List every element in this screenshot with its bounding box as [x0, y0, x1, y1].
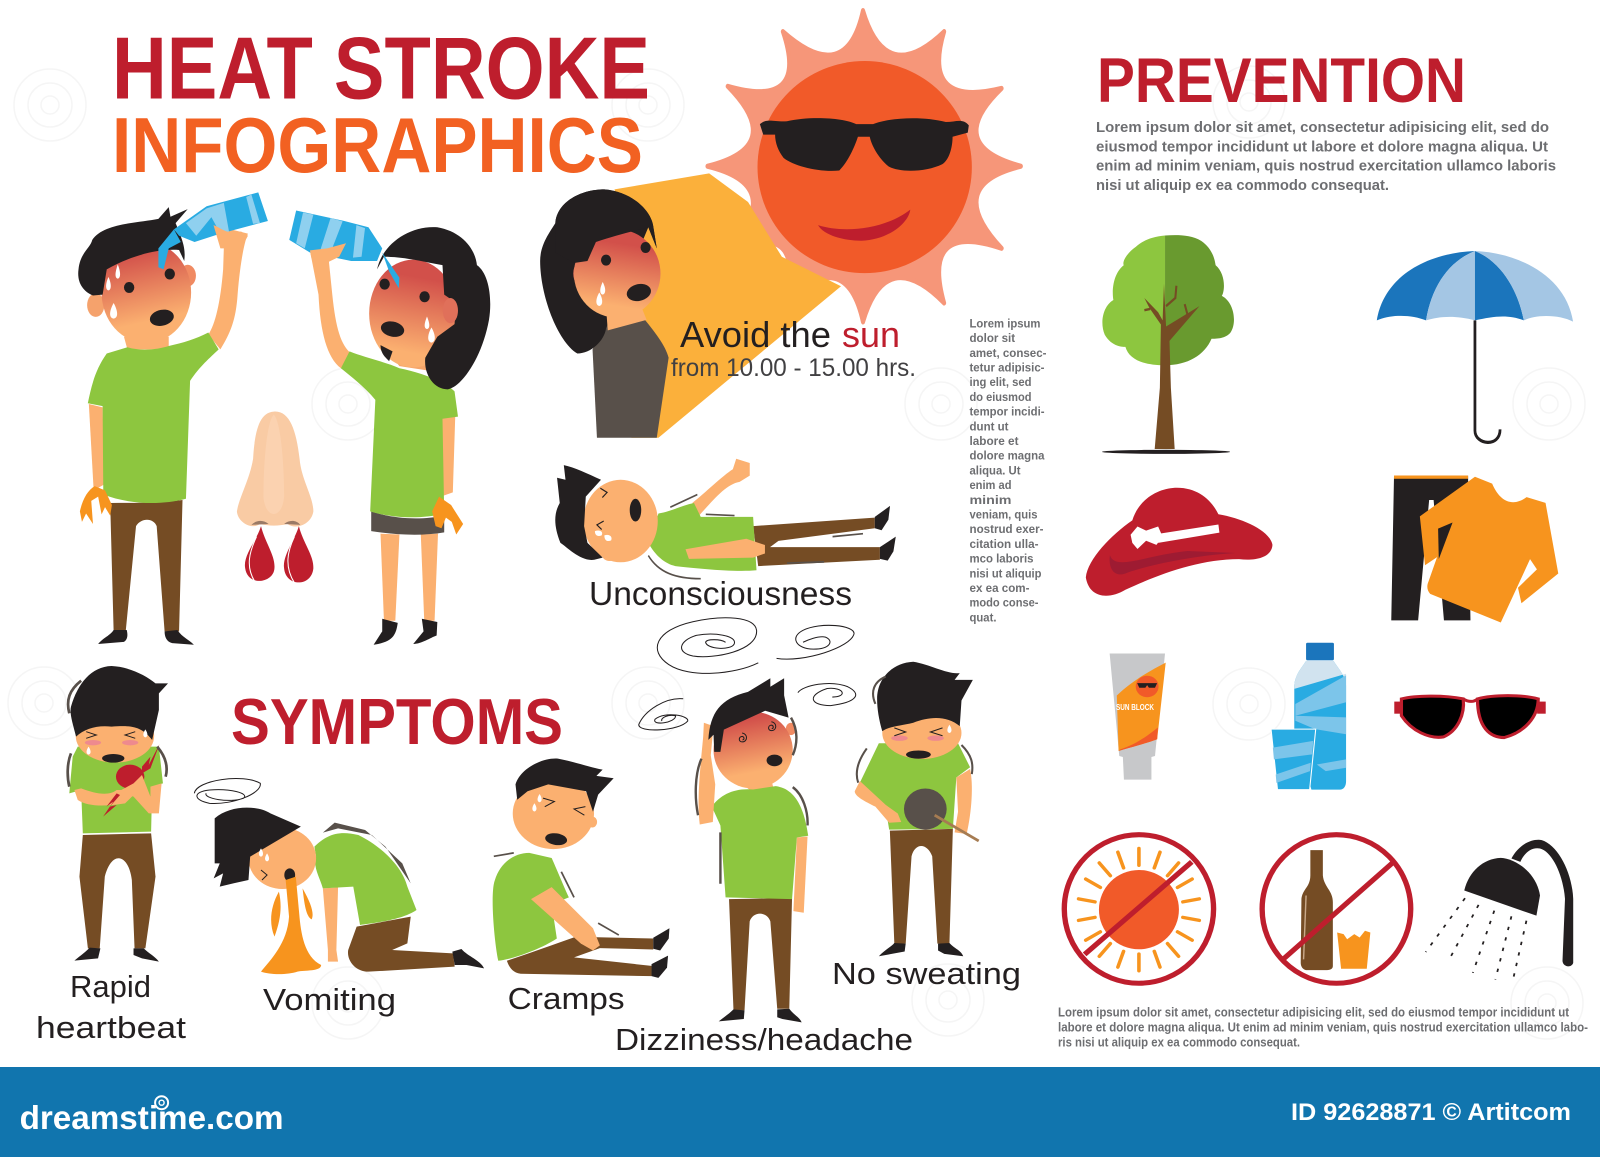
- text block: bottom lorem ipsum: Lorem ipsum dolor sit amet, consectetur adipisicing elit, sed do eiusmod tempor incididunt ut: [1058, 1006, 1570, 1020]
- text block: prevention intro: enim ad minim veniam, quis nostrud exercitation ullamco laboris: [1096, 159, 1556, 175]
- figure: cramps man: [493, 759, 669, 978]
- text block: narrow lorem ipsum column: amet, consec-: [970, 348, 1047, 360]
- footer: image id and credit: ID 92628871 © Artitcom: [1291, 1099, 1571, 1126]
- icon: water bottle and glass: [1271, 643, 1346, 790]
- label: avoid the sun: sun: [842, 314, 900, 355]
- text block: narrow lorem ipsum column: [970, 318, 1047, 624]
- figure: woman pouring water on head: [289, 210, 490, 645]
- title: heat stroke infographics: HEAT STROKE: [112, 18, 650, 118]
- symptom labels: [36, 956, 1021, 1057]
- text block: prevention intro: eiusmod tempor incididunt ut labore et dolore magna aliqua. Ut: [1096, 139, 1548, 155]
- text block: narrow lorem ipsum column: tetur adipisic-: [970, 362, 1045, 374]
- text block: narrow lorem ipsum column: veniam, quis: [970, 510, 1038, 522]
- figure: no sweating man with fan: [855, 662, 979, 956]
- text block: narrow lorem ipsum column: quat.: [970, 612, 996, 624]
- text block: narrow lorem ipsum column: nisi ut aliquip: [970, 568, 1042, 580]
- text block: prevention intro: Lorem ipsum dolor sit amet, consectetur adipisicing elit, sed do: [1096, 120, 1549, 136]
- text block: narrow lorem ipsum column: aliqua. Ut: [970, 465, 1021, 477]
- icon: umbrella: [1377, 251, 1573, 442]
- icon: sunblock tube: [1110, 654, 1166, 780]
- icon: long sleeve clothes: [1391, 476, 1558, 622]
- text block: narrow lorem ipsum column: modo conse-: [970, 598, 1039, 610]
- text block: narrow lorem ipsum column: nostrud exer-: [970, 524, 1044, 536]
- text block: bottom lorem ipsum: ris nisi ut aliquip ex ea commodo consequat.: [1058, 1035, 1300, 1049]
- text block: narrow lorem ipsum column: tempor incidi-: [970, 407, 1045, 419]
- icon: no alcohol sign: [1262, 835, 1411, 983]
- text block: narrow lorem ipsum column: ex ea com-: [970, 583, 1030, 595]
- symptom labels: Cramps: [508, 981, 625, 1016]
- text block: narrow lorem ipsum column: enim ad: [970, 480, 1012, 492]
- symptom labels: heartbeat: [36, 1010, 186, 1045]
- symptom labels: Dizziness/headache: [615, 1022, 913, 1057]
- symptom labels: No sweating: [832, 956, 1021, 991]
- icon: red hat: [1086, 488, 1272, 596]
- icon: no sun sign: [1064, 835, 1214, 983]
- label: avoid the sun: Avoid the: [680, 314, 831, 355]
- icon: dizzy spirals: [639, 618, 856, 730]
- figure: woman in the sun: [540, 189, 669, 438]
- text block: bottom lorem ipsum: [1058, 1006, 1588, 1049]
- text block: narrow lorem ipsum column: labore et: [970, 436, 1019, 448]
- text block: narrow lorem ipsum column: do eiusmod: [970, 392, 1032, 404]
- text block: narrow lorem ipsum column: dolore magna: [970, 451, 1045, 463]
- text block: narrow lorem ipsum column: dunt ut: [970, 421, 1009, 433]
- text block: narrow lorem ipsum column: Lorem ipsum: [970, 318, 1040, 330]
- heading: prevention: PREVENTION: [1097, 46, 1466, 116]
- figure: dizzy man: [696, 678, 808, 1022]
- text block: narrow lorem ipsum column: citation ulla-: [970, 539, 1039, 551]
- figure: cramps, dizziness and no sweating men: [493, 618, 979, 1022]
- text block: narrow lorem ipsum column: ing elit, sed: [970, 377, 1032, 389]
- title: heat stroke infographics: [112, 18, 650, 189]
- label: unconsciousness: Unconsciousness: [589, 575, 852, 612]
- text block: narrow lorem ipsum column: dolor sit: [970, 333, 1015, 345]
- text block: prevention intro: [1096, 120, 1556, 194]
- label: avoid the sun: [671, 314, 916, 382]
- heading: symptoms: SYMPTOMS: [231, 685, 563, 758]
- text block: prevention intro: nisi ut aliquip ex ea commodo consequat.: [1096, 178, 1389, 194]
- footer: dreamstime logo: dreamstime.com: [20, 1099, 284, 1136]
- icon: red sunglasses: [1394, 696, 1546, 738]
- text block: narrow lorem ipsum column: mco laboris: [970, 554, 1034, 566]
- illustration: sun with sunglasses and light beam: [615, 11, 1021, 438]
- label: avoid the sun: from 10.00 - 15.00 hrs.: [671, 354, 916, 382]
- figure: rapid heartbeat man: [68, 666, 168, 962]
- symptom labels: Vomiting: [263, 982, 396, 1017]
- figure: vomiting man: [194, 779, 484, 974]
- icon: shower head: [1426, 840, 1573, 984]
- title: heat stroke infographics: INFOGRAPHICS: [112, 101, 643, 189]
- figure: unconscious man lying down: [555, 459, 896, 579]
- text block: narrow lorem ipsum column: minim: [970, 495, 1012, 507]
- footer bar: [0, 1067, 1600, 1157]
- symptom labels: Rapid: [70, 969, 151, 1004]
- icon: tree: [1102, 235, 1234, 454]
- icon: sunblock tube: SUN BLOCK: [1116, 703, 1154, 712]
- icon: nose with bleeding nostrils: [237, 412, 313, 583]
- figure: man pouring water on head: [78, 192, 268, 645]
